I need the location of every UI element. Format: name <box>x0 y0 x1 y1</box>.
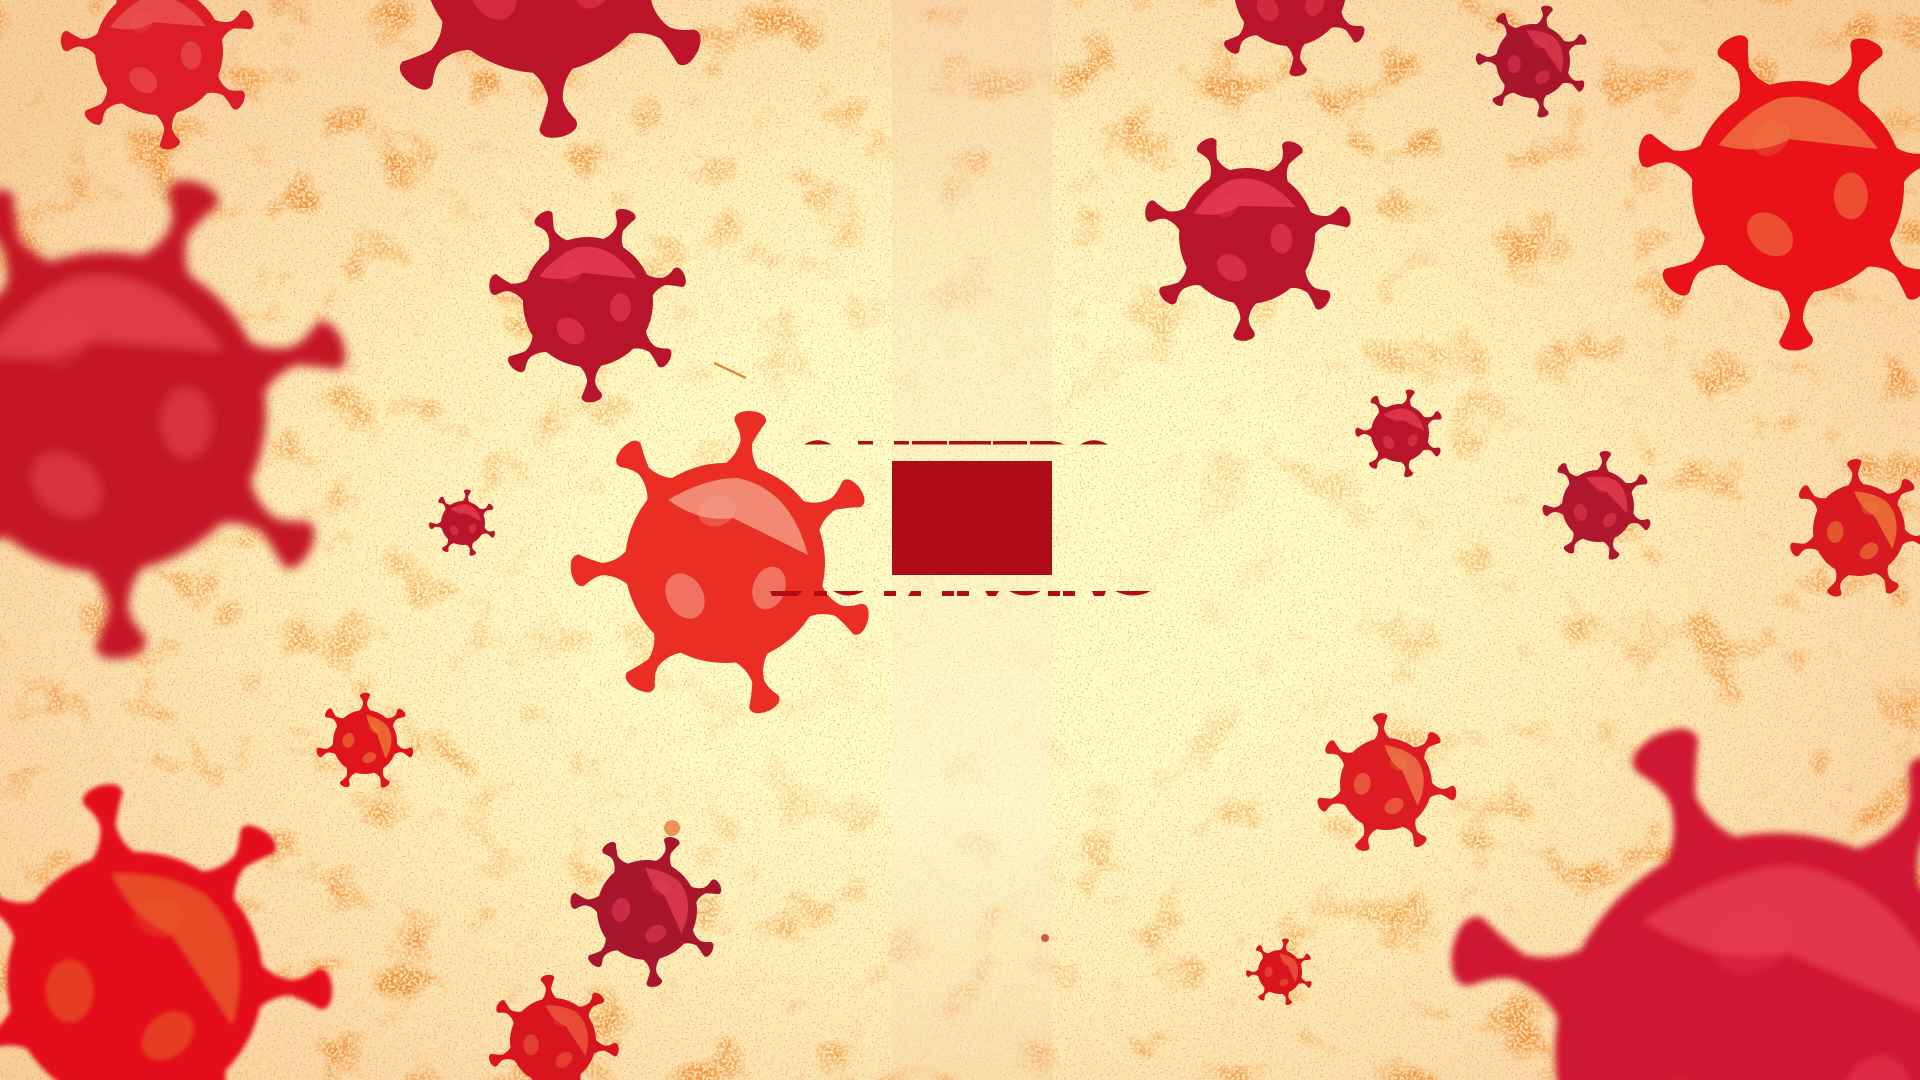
vertical paper band <box>892 0 1052 1080</box>
icon: tiny virus bottom <box>1241 933 1320 1010</box>
icon: virus top centre-right <box>1180 0 1401 98</box>
icon: virus top left <box>34 0 285 173</box>
icon: virus bottom centre-left <box>549 811 746 1006</box>
icon: blurred large virus left <box>0 90 429 726</box>
title reveal block <box>892 461 1052 575</box>
icon: large virus bottom left <box>0 751 364 1080</box>
icon: tiny virus left <box>425 485 502 560</box>
ink splat lower centre <box>1041 934 1049 942</box>
icon: virus bottom edge <box>481 969 625 1080</box>
clipped title line: bottom <box>770 591 1151 596</box>
icon: main virus centre <box>546 384 905 736</box>
paper scratch mark <box>714 363 746 378</box>
icon: small virus lower left <box>315 693 415 790</box>
icon: small virus centre-right <box>1346 379 1455 486</box>
icon: small virus top right <box>1463 0 1603 129</box>
icon: virus upper centre-right <box>1108 97 1385 371</box>
icon: virus far right <box>1783 454 1920 603</box>
ink splat near lower virus <box>664 820 680 836</box>
icon: virus upper centre-left <box>452 166 723 435</box>
icon: virus lower right <box>1309 707 1463 858</box>
icon: virus top centre-left <box>305 0 780 184</box>
icon: small virus right <box>1535 443 1661 567</box>
clipped title line: top <box>804 440 1108 444</box>
icon: blurred large virus bottom right <box>1338 617 1920 1080</box>
icon: large virus right <box>1580 0 1920 399</box>
